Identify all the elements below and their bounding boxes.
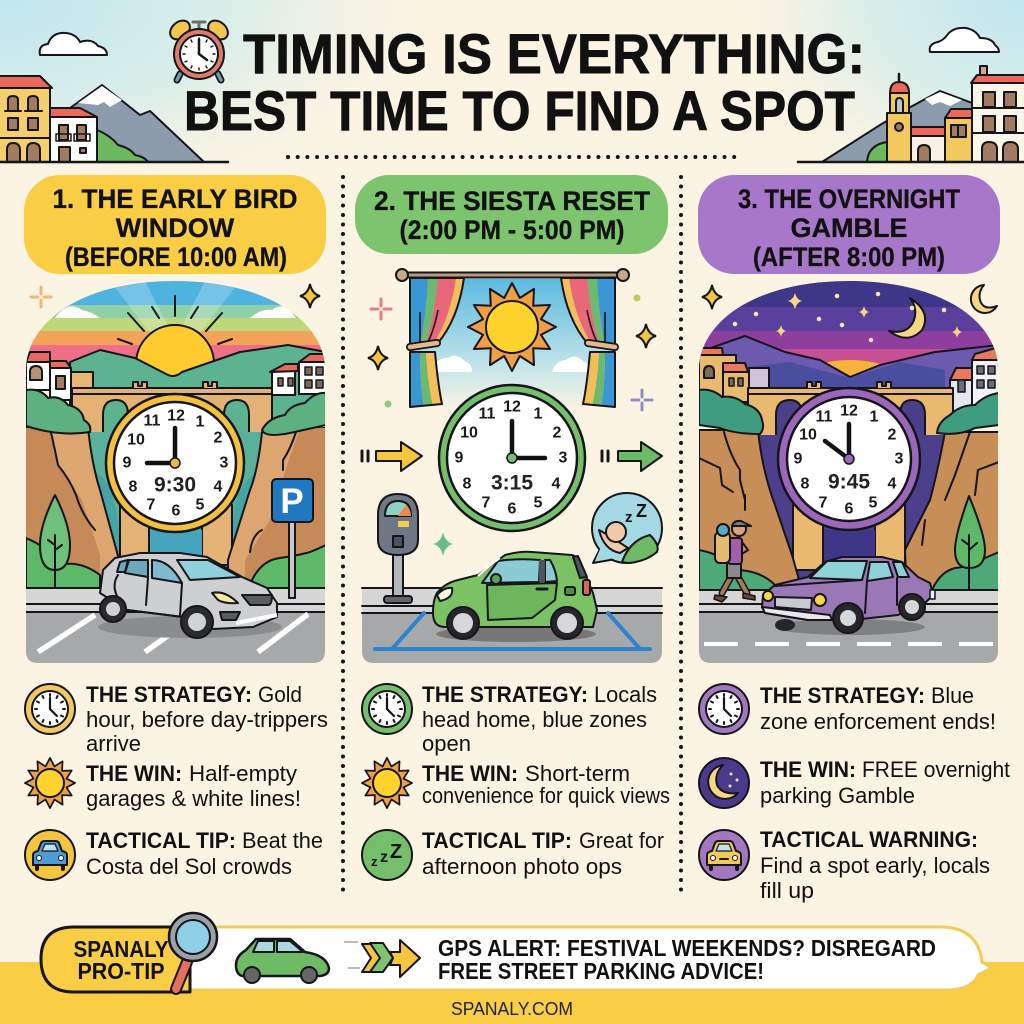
clock 9:30: 11 — [144, 412, 161, 430]
title — [184, 22, 865, 142]
sparkles panel 1 — [31, 284, 320, 308]
clock 9:30: 2 — [214, 430, 223, 446]
green car — [433, 552, 597, 642]
parking sign: P — [280, 482, 304, 521]
icon: green car footer — [236, 939, 329, 983]
strategy text: head home, blue zones — [422, 707, 647, 732]
clock 9:30: 12 — [167, 408, 185, 424]
win text: THE WIN: — [760, 757, 856, 782]
clock 3:15: 1 — [534, 406, 543, 422]
parking sign — [272, 479, 313, 598]
strategy text: zone enforcement ends! — [760, 709, 996, 734]
clock 3:15: 9 — [455, 450, 464, 466]
clock 9:45: 6 — [845, 500, 854, 518]
icon: moon — [699, 758, 749, 808]
heading: overnight gamble: GAMBLE — [790, 213, 908, 243]
clock 3:15: 12 — [503, 398, 521, 416]
icon: zzz — [362, 830, 412, 880]
win text: THE WIN: — [86, 761, 182, 786]
icon: green clock — [362, 684, 412, 734]
tip text: TACTICAL TIP: — [422, 828, 572, 853]
column divider right — [679, 177, 683, 897]
clock 9:45: 10 — [799, 426, 817, 444]
sparkles panel 3 — [702, 285, 997, 313]
strategy text — [422, 682, 657, 756]
strategy text: THE STRATEGY: — [760, 683, 925, 708]
clock 9:30: 8 — [129, 478, 138, 496]
heading: siesta reset: 2. THE SIESTA RESET — [374, 186, 650, 216]
clock 9:30: 3 — [220, 454, 229, 472]
title: TIMING IS EVERYTHING: — [243, 22, 865, 85]
alarm clock icon — [166, 17, 232, 80]
strategy text: THE STRATEGY: — [422, 682, 588, 707]
column 2 bullets — [362, 682, 670, 880]
heading: overnight gamble — [698, 175, 1000, 274]
strategy text: Blue — [931, 683, 974, 708]
clock 3:15: 3 — [559, 450, 568, 466]
warning text: Find a spot early, locals — [760, 853, 990, 878]
column 3 bullets — [699, 683, 1011, 903]
clock 9:30: 7 — [147, 496, 156, 514]
clock 9:45: 9:45 — [828, 470, 870, 494]
icon: zzz: z — [371, 854, 378, 869]
warning text — [760, 827, 990, 903]
pro-tip badge: PRO-TIP — [78, 958, 164, 984]
clock 9:45: 4 — [888, 476, 897, 492]
pro-tip badge: SPANALY — [74, 936, 168, 962]
heading: early bird: 1. THE EARLY BIRD — [52, 184, 298, 214]
panel 1 scene: morning canyon — [26, 281, 326, 663]
silver SUV — [98, 553, 282, 638]
hiker — [714, 521, 755, 602]
column 1 bullets — [25, 682, 328, 880]
clock 3:15: 7 — [482, 494, 491, 512]
pro-tip badge — [41, 927, 190, 992]
heading: early bird — [24, 175, 326, 274]
GPS alert text: FREE STREET PARKING ADVICE! — [438, 958, 764, 984]
clock 9:30: 10 — [127, 432, 145, 448]
panel 2 street — [362, 588, 662, 663]
tip text: afternoon photo ops — [422, 854, 622, 879]
clock 9:30 — [106, 394, 244, 532]
clock 9:45: 2 — [888, 426, 897, 444]
clock 9:45: 11 — [816, 408, 833, 426]
heading: overnight gamble: (AFTER 8:00 PM) — [753, 242, 945, 272]
warning text: TACTICAL WARNING: — [760, 827, 978, 852]
clock 9:30: 4 — [214, 478, 223, 496]
win text: parking Gamble — [760, 783, 915, 808]
win text: FREE overnight — [862, 757, 1011, 782]
clock 3:15: 10 — [460, 424, 478, 442]
clock 9:45: 3 — [895, 450, 904, 468]
tip text: Great for — [579, 828, 664, 853]
heading: siesta reset — [355, 175, 668, 254]
clock 3:15 — [439, 385, 585, 531]
website: SPANALY.COM — [451, 999, 573, 1019]
win text: garages & white lines! — [86, 786, 301, 811]
icon: yellow car — [699, 830, 749, 880]
title: BEST TIME TO FIND A SPOT — [184, 79, 855, 142]
clock 9:30: 9 — [123, 454, 132, 472]
strategy text: open — [422, 731, 471, 756]
footer band — [0, 962, 1024, 1024]
purple car — [762, 557, 935, 635]
clock 9:30: 1 — [196, 414, 205, 430]
icon: speed arrow — [344, 940, 420, 977]
strategy text — [760, 683, 996, 734]
clock 9:45: 9 — [794, 450, 803, 468]
clock 3:15: 6 — [508, 500, 517, 518]
sleep bubble — [592, 493, 662, 563]
strategy text: Locals — [594, 682, 657, 707]
pro-tip alert bar — [180, 927, 992, 990]
icon: gold clock — [25, 684, 75, 734]
clock 9:30: 6 — [172, 502, 181, 520]
strategy text: THE STRATEGY: — [86, 682, 252, 707]
clock 3:15: 2 — [553, 424, 562, 442]
dotted divider under title — [288, 155, 742, 159]
parking meter — [378, 494, 418, 603]
win text: Half-empty — [189, 761, 298, 786]
win text — [422, 761, 670, 808]
arrow yellow — [362, 442, 422, 471]
win text: THE WIN: — [422, 761, 518, 786]
win text: Short-term — [525, 761, 630, 786]
right town scene — [798, 28, 1024, 162]
column divider left — [341, 177, 345, 897]
GPS alert text: GPS ALERT: FESTIVAL WEEKENDS? DISREGARD — [438, 935, 936, 961]
clock 3:15: 11 — [479, 406, 496, 422]
icon: purple clock — [699, 684, 749, 734]
heading: early bird: WINDOW — [116, 213, 235, 243]
icon: zzz: Z — [390, 841, 402, 863]
sleep bubble: z — [625, 509, 632, 526]
left town scene — [0, 33, 228, 162]
clock 3:15: 5 — [534, 494, 543, 512]
sleep bubble: Z — [636, 501, 647, 521]
clock 9:45: 7 — [819, 494, 828, 512]
sky glow right — [700, 0, 1024, 165]
win text: convenience for quick views — [422, 783, 670, 808]
heading: early bird: (BEFORE 10:00 AM) — [65, 242, 287, 272]
icon: blue car — [25, 830, 75, 880]
GPS alert text — [438, 935, 936, 984]
icon: sun — [25, 758, 75, 808]
clock 9:30: 9:30 — [154, 474, 196, 496]
clock 9:45: 5 — [869, 494, 878, 512]
arrow green — [602, 442, 662, 471]
clock 3:15: 8 — [463, 476, 472, 492]
strategy text: arrive — [86, 731, 141, 756]
sparkles panel 2 — [368, 294, 656, 556]
siesta window with sun — [396, 269, 629, 409]
tip text: TACTICAL TIP: — [86, 828, 236, 853]
clock 9:45: 8 — [801, 476, 810, 492]
win text — [86, 761, 301, 811]
icon: zzz: z — [380, 849, 388, 866]
strategy text: hour, before day-trippers — [86, 707, 328, 732]
clock 3:15: 4 — [552, 476, 561, 492]
clock 9:45 — [778, 388, 920, 530]
tip text — [86, 828, 323, 879]
clock 3:15: 3:15 — [491, 472, 533, 494]
warning text: fill up — [760, 878, 814, 903]
heading: overnight gamble: 3. THE OVERNIGHT — [738, 184, 960, 214]
tip text: Costa del Sol crowds — [86, 854, 292, 879]
sky glow left — [0, 0, 480, 165]
heading: siesta reset: (2:00 PM - 5:00 PM) — [400, 215, 624, 245]
strategy text: Gold — [258, 682, 302, 707]
clock 9:30: 5 — [196, 496, 205, 514]
icon: sun — [362, 758, 412, 808]
tip text: Beat the — [242, 828, 323, 853]
clock 9:45: 12 — [840, 402, 858, 420]
icon: magnifying glass — [169, 913, 217, 989]
tip text — [422, 828, 664, 879]
panel 3 scene: night canyon — [699, 281, 1000, 663]
win text — [760, 757, 1011, 808]
clock 9:45: 1 — [870, 408, 879, 426]
strategy text — [86, 682, 328, 756]
